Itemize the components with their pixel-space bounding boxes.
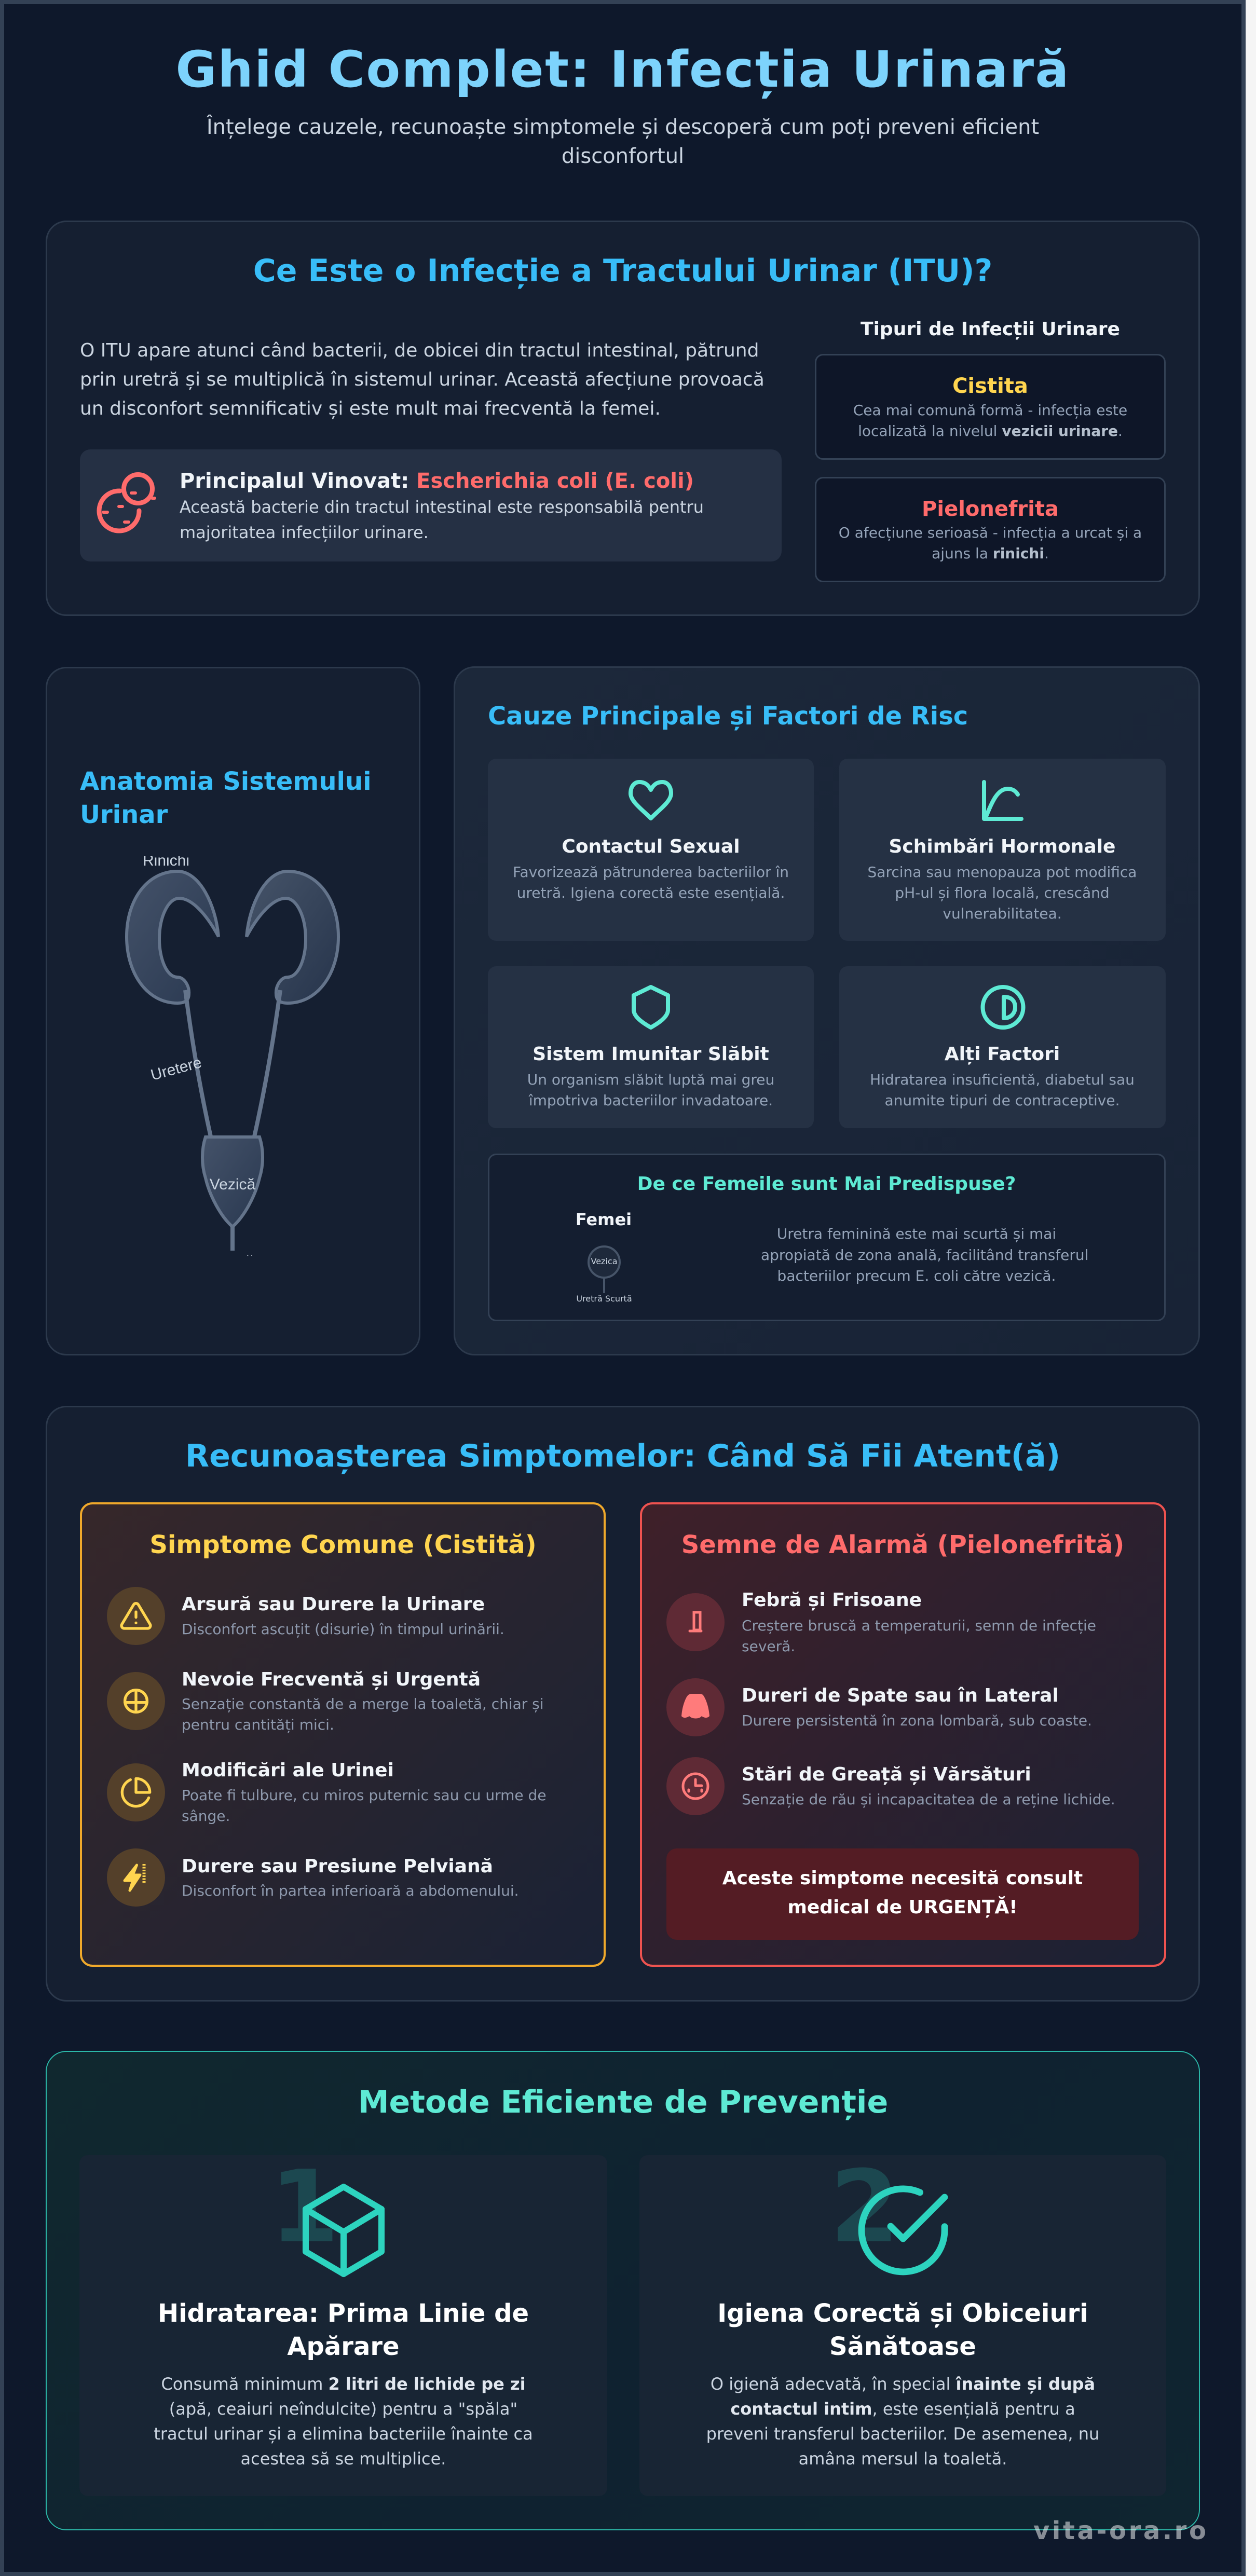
alarm signs heading: Semne de Alarmă (Pielonefrită) [681, 1530, 1124, 1559]
icon: thermometer [666, 1593, 725, 1651]
hygiene title: Sănătoase [829, 2332, 976, 2361]
weak immune system text: împotriva bacteriilor invadatoare. [529, 1092, 773, 1109]
title: Ghid Complet: Infecția Urinară [175, 40, 1070, 99]
label: ureters: Uretere [149, 1054, 203, 1084]
cystitis name: Cistita [952, 374, 1028, 398]
hydration text: tractul urinar și a elimina bacteriile înainte ca [154, 2424, 533, 2444]
sign: nausea: Stări de Greață și Vărsături [742, 1764, 1031, 1785]
right ureter [254, 990, 280, 1136]
hydration text: acestea să se multiplice. [241, 2449, 446, 2469]
sign: fever: Febră și Frisoane [742, 1590, 922, 1611]
women label: Femei [576, 1210, 632, 1229]
card: pyelonephritis [815, 477, 1166, 582]
urethra [230, 1227, 235, 1251]
sign text: back pain: Durere persistentă în zona lombară, sub coaste. [742, 1712, 1092, 1729]
icon: warning [107, 1587, 165, 1645]
panel: what is a UTI [46, 221, 1200, 616]
sign: back pain: Dureri de Spate sau în Lateral [742, 1685, 1059, 1706]
heading: prevention: Metode Eficiente de Prevenție [358, 2084, 888, 2120]
urgent text: medical de URGENȚĂ! [787, 1897, 1018, 1918]
hormonal changes text: pH-ul și flora locală, crescând [895, 884, 1110, 901]
hygiene title [639, 2297, 1166, 2363]
icon: nausea [666, 1757, 725, 1815]
symptom text: urine changes: Poate fi tulbure, cu miros puternic sau cu urme de [182, 1787, 547, 1804]
other factors title: Alți Factori [945, 1044, 1060, 1065]
panel: prevention [46, 2051, 1200, 2530]
weak immune system text: Un organism slăbit luptă mai greu [527, 1071, 774, 1088]
heading: anatomy: Anatomia Sistemului [80, 767, 372, 796]
hygiene text [639, 2372, 1166, 2471]
box heading: De ce Femeile sunt Mai Predispuse? [637, 1173, 1016, 1195]
hydration text: Consumă minimum 2 litri de lichide pe zi [161, 2374, 526, 2394]
symptom: burning: Arsură sau Durere la Urinare [182, 1594, 485, 1615]
female urethra diagram: Uretră Scurtă [576, 1294, 632, 1304]
icon: bacteria [97, 472, 156, 533]
card: alarm signs [640, 1502, 1166, 1967]
heading: what is a UTI: Ce Este o Infecție a Tractului Urinar (ITU)? [253, 253, 992, 289]
symptom text: frequency: pentru cantități mici. [182, 1716, 334, 1733]
sign text: fever [742, 1617, 1096, 1655]
hygiene text: O igienă adecvată, în special înainte și după [711, 2374, 1095, 2394]
hydration title: Apărare [287, 2332, 400, 2361]
callout text [180, 497, 704, 542]
sign text: nausea: Senzație de rău și incapacitatea de a reține lichide. [742, 1791, 1115, 1808]
intro paragraph [80, 340, 764, 419]
icon: urine changes [107, 1763, 165, 1821]
heading: anatomy [80, 767, 372, 829]
symptom text: burning: Disconfort ascuțit (disurie) în timpul urinării. [182, 1621, 504, 1638]
callout: main culprit [80, 449, 782, 561]
heading: infection types: Tipuri de Infecții Urinare [861, 319, 1120, 340]
card: hygiene [639, 2155, 1166, 2496]
pyelonephritis description: O afecțiune serioasă - infecția a urcat și a [839, 524, 1142, 541]
hygiene text: preveni transferul bacteriilor. De asemenea, nu [706, 2424, 1099, 2444]
icon: shield [632, 985, 670, 1030]
hormonal changes text: Sarcina sau menopauza pot modifica [868, 864, 1137, 881]
icon: chart [982, 780, 1023, 821]
left kidney [127, 871, 219, 1003]
other factors text [870, 1071, 1135, 1109]
heading: causes: Cauze Principale și Factori de Risc [488, 702, 968, 731]
panel: causes [454, 666, 1200, 1355]
panel: symptoms [46, 1406, 1200, 2002]
box explanation [761, 1225, 1088, 1284]
symptom text: frequency: Senzație constantă de a merge la toaletă, chiar și [182, 1695, 544, 1712]
hydration title [79, 2297, 607, 2363]
card: other factors [839, 966, 1166, 1128]
symptom: pelvic pain: Durere sau Presiune Pelviană [182, 1856, 493, 1877]
left ureter [185, 990, 211, 1136]
hydration text [79, 2372, 607, 2471]
callout: urgent [666, 1848, 1139, 1940]
urgent text: Aceste simptome necesită consult [722, 1868, 1083, 1889]
sexual contact text [513, 864, 789, 901]
box explanation: Uretra feminină este mai scurtă și mai [777, 1225, 1056, 1242]
heading: symptoms: Recunoașterea Simptomelor: Când Să Fii Atent(ă) [185, 1438, 1060, 1474]
hormonal changes text: vulnerabilitatea. [943, 905, 1062, 922]
hormonal changes text [868, 864, 1137, 922]
number 1: 1 [270, 2149, 339, 2265]
card: hydration [79, 2155, 607, 2496]
label: bladder: Vezică [210, 1176, 256, 1193]
bladder [202, 1137, 263, 1227]
icon: circle half [981, 985, 1026, 1030]
callout heading: Principalul Vinovat: Escherichia coli (E. coli) [180, 469, 694, 493]
intro paragraph: un disconfort semnificativ și este mult mai frecventă la femei. [80, 398, 661, 419]
card: sexual contact [488, 759, 814, 941]
symptom text: frequency [182, 1695, 544, 1733]
cystitis description: localizată la nivelul vezicii urinare. [858, 422, 1123, 440]
box: why women are predisposed [488, 1154, 1166, 1321]
weak immune system text [527, 1071, 774, 1109]
pyelonephritis description [839, 524, 1142, 562]
weak immune system title: Sistem Imunitar Slăbit [533, 1044, 769, 1065]
urgent text [666, 1864, 1139, 1922]
symptom text: pelvic pain: Disconfort în partea inferioară a abdomenului. [182, 1882, 519, 1899]
cystitis description: Cea mai comună formă - infecția este [853, 402, 1127, 419]
sign text: fever: Creștere bruscă a temperaturii, semn de infecție [742, 1617, 1096, 1634]
cystitis description [853, 402, 1127, 440]
card: weak immune system [488, 966, 814, 1128]
card: hormonal changes [839, 759, 1166, 941]
icon: back pain [666, 1678, 725, 1736]
symptom: urine changes: Modificări ale Urinei [182, 1760, 394, 1781]
callout text: Această bacterie din tractul intestinal este responsabilă pentru [180, 497, 704, 517]
intro paragraph: prin uretră și se multiplică în sistemul urinar. Această afecțiune provoacă [80, 369, 764, 390]
female urethra diagram [576, 1245, 632, 1304]
card: common symptoms [80, 1502, 606, 1967]
pyelonephritis description: ajuns la rinichi. [932, 545, 1049, 562]
hydration text: (apă, ceaiuri neîndulcite) pentru a "spăla" [169, 2399, 517, 2419]
symptom text: urine changes [182, 1787, 547, 1825]
icon: heart [629, 780, 673, 820]
heading: anatomy: Urinar [80, 800, 168, 829]
icon: check circle [853, 2181, 953, 2280]
symptom text: urine changes: sânge. [182, 1807, 230, 1825]
right kidney [247, 871, 338, 1003]
number 2: 2 [830, 2149, 899, 2265]
hygiene text: contactul intim, este esențială pentru a [730, 2399, 1075, 2419]
pyelonephritis name: Pielonefrita [922, 497, 1059, 521]
other factors text: anumite tipuri de contraceptive. [885, 1092, 1120, 1109]
subtitle: Înțelege cauzele, recunoaște simptomele și descoperă cum poți preveni eficient [207, 115, 1039, 139]
callout text: majoritatea infecțiilor urinare. [180, 523, 429, 542]
intro paragraph: O ITU apare atunci când bacterii, de obicei din tractul intestinal, pătrund [80, 340, 759, 361]
common symptoms heading: Simptome Comune (Cistită) [149, 1530, 537, 1559]
symptom: frequency: Nevoie Frecventă și Urgentă [182, 1669, 481, 1690]
sexual contact text: Favorizează pătrunderea bacteriilor în [513, 864, 789, 881]
panel: anatomy [46, 667, 420, 1355]
hygiene text: amâna mersul la toaletă. [799, 2449, 1007, 2469]
other factors text: Hidratarea insuficientă, diabetul sau [870, 1071, 1135, 1088]
icon: box [300, 2183, 387, 2278]
sign text: fever: severă. [742, 1638, 795, 1655]
sexual contact title: Contactul Sexual [562, 836, 740, 857]
hygiene title: Igiena Corectă și Obiceiuri [717, 2299, 1088, 2328]
hormonal changes title: Schimbări Hormonale [889, 836, 1115, 857]
icon: pelvic pain [107, 1848, 165, 1907]
box explanation: bacteriilor precum E. coli către vezică. [777, 1267, 1056, 1284]
anatomy diagram [125, 856, 340, 1256]
subtitle: disconfortul [562, 144, 684, 168]
subtitle [207, 114, 1039, 168]
hydration title: Hidratarea: Prima Linie de [158, 2299, 529, 2328]
sexual contact text: uretră. Igiena corectă este esențială. [517, 884, 785, 901]
female urethra diagram: Vezica [591, 1256, 618, 1266]
card: cystitis [815, 354, 1166, 460]
watermark: vita-ora.ro [1033, 2516, 1209, 2545]
icon: frequency [107, 1672, 165, 1730]
box explanation: apropiată de zona anală, facilitând transferul [761, 1246, 1088, 1264]
